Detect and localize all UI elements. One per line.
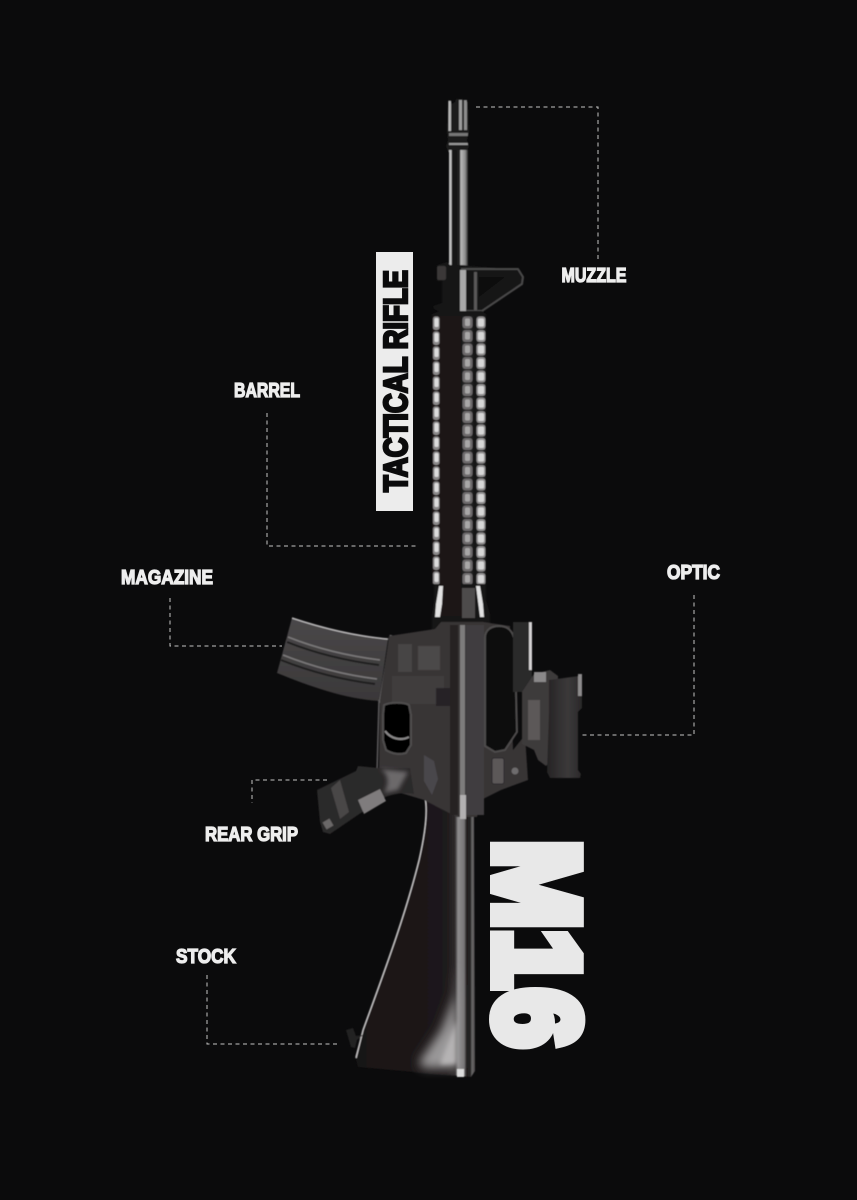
- magazine: [277, 618, 391, 703]
- tactical rifle tag: TACTICAL RIFLE: [377, 270, 414, 492]
- handguard: [432, 311, 490, 630]
- label: optic: [580, 562, 720, 735]
- rear grip: [317, 766, 414, 834]
- label: barrel: BARREL: [234, 380, 300, 402]
- label: muzzle: [476, 107, 626, 287]
- optic: [513, 622, 582, 778]
- receiver: [379, 622, 528, 819]
- title: M16: M16: [470, 840, 603, 1048]
- label: barrel: [234, 380, 418, 546]
- label: rear grip: [205, 780, 327, 846]
- muzzle: [446, 99, 469, 152]
- stock: [346, 798, 475, 1077]
- carry handle: [485, 626, 517, 752]
- label: optic: OPTIC: [667, 562, 720, 584]
- rifle: [277, 99, 582, 1077]
- label: stock: STOCK: [176, 946, 236, 968]
- label: magazine: MAGAZINE: [121, 567, 213, 589]
- barrel: [449, 150, 468, 315]
- label: muzzle: MUZZLE: [562, 265, 626, 287]
- label: stock: [176, 946, 340, 1044]
- front sight: [433, 262, 524, 312]
- trigger guard: [377, 700, 411, 772]
- label: magazine: [121, 567, 282, 646]
- label: rear grip: REAR GRIP: [205, 824, 298, 846]
